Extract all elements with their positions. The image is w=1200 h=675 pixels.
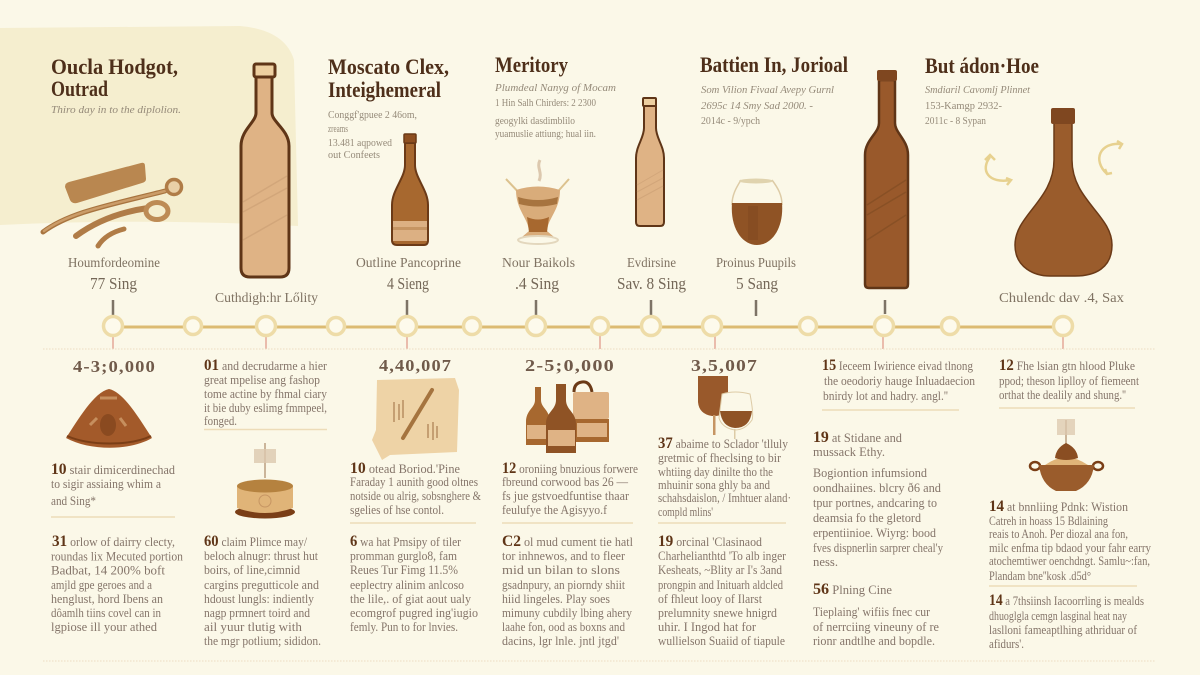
text column 4: laahe fon, ood as boxns and bbox=[502, 620, 626, 634]
heading: Oucla Hodgot: Thiro day in to the diplolion. bbox=[51, 105, 181, 116]
text column 2: boirs, of line,cimnid bbox=[204, 563, 301, 577]
heading: But adon Hoe bbox=[925, 53, 1039, 127]
heading: But adon Hoe: 153-Kamgp 2932- bbox=[925, 101, 1002, 112]
timeline labels: 5 Sang bbox=[736, 274, 778, 293]
heading: Meritory bbox=[494, 52, 616, 140]
timeline labels: Proinus Puupils bbox=[716, 255, 796, 270]
icon: tools bbox=[43, 163, 182, 246]
heading: Moscato Clex: 13.481 aqpowed bbox=[328, 138, 392, 149]
text column 3: eeplectry alinim anlcoso bbox=[350, 578, 464, 592]
text column 3: 6 wa hat Pmsipy of tiler bbox=[350, 533, 462, 550]
text column 2: ail yuur tlutig with bbox=[204, 620, 303, 634]
text column 3: notside ou alrig, sobsnghere & bbox=[350, 489, 481, 503]
icon: steaming cup bbox=[506, 160, 569, 244]
text column 2: it bie duby eslimg fmmpeel, bbox=[204, 401, 327, 415]
text column 3: femly. Pun to for lnvies. bbox=[350, 620, 458, 634]
text column 6: deamsia fo the gletord bbox=[813, 511, 922, 525]
text column 5: gretmic of fheclsing to bir bbox=[658, 451, 782, 465]
text column 6: of nerrciing vineuny of re bbox=[813, 620, 939, 634]
text column 7: laslloni fameaptlhing athriduar of bbox=[989, 623, 1138, 637]
heading: Meritory: geogylki dasdimblilo bbox=[495, 116, 575, 127]
text column 3: Faraday 1 aunith good oltnes bbox=[350, 475, 478, 489]
text column 6: ness. bbox=[813, 555, 838, 569]
text column 5: prongpin and Inituarh aldcled bbox=[658, 578, 784, 592]
timeline labels bbox=[68, 255, 1124, 305]
text column 5: uhir. I Ingod hat for bbox=[658, 620, 757, 634]
text column 7: dhuoglgla cemgn lasginal heat nay bbox=[989, 609, 1128, 623]
figure numbers bbox=[73, 356, 758, 376]
text column 4: dacins, lgr lnle. jntl jtgd' bbox=[502, 634, 619, 648]
text column 7: 14 at bnnliing Pdnk: Wistion bbox=[989, 498, 1129, 515]
text column 6: the oeodoriy hauge Inluadaecion bbox=[824, 374, 976, 388]
text column 1: amjld gpe geroes and a bbox=[51, 578, 152, 592]
icon: bread wedge bbox=[66, 389, 152, 448]
heading: Oucla Hodgot bbox=[51, 54, 181, 116]
timeline labels: Houmfordeomine bbox=[68, 255, 160, 270]
text column 1: roundas lix Mecuted portion bbox=[51, 550, 184, 564]
text column 3: promman gurglo8, fam bbox=[350, 549, 457, 563]
timeline labels: Nour Baikols bbox=[502, 255, 575, 270]
text column 3: the lile,. of giat aout ualy bbox=[350, 592, 472, 606]
heading: Meritory: Plumdeal Nanyg of Mocam bbox=[494, 83, 616, 94]
text column 4: mimuny cubdily lbing ahery bbox=[502, 606, 633, 620]
icon: tureen bbox=[1030, 419, 1103, 491]
text column 5: Kesheats, ~Blity ar I's 3and bbox=[658, 563, 783, 577]
text column 3: ecomgrof pugred ing'iugio bbox=[350, 606, 478, 620]
text column 5: 37 abaime to Sclador 'tlluly bbox=[658, 435, 789, 452]
timeline labels: Outline Pancoprine bbox=[356, 255, 461, 270]
timeline labels: Cuthdigh:hr Lőlity bbox=[215, 290, 318, 305]
text column 1: 31 orlow of dairry clecty, bbox=[52, 533, 175, 550]
text column 1: Badbat, 14 200% boft bbox=[51, 564, 166, 578]
heading: Battien In: 2695c 14 Smy Sad 2000. - bbox=[701, 101, 813, 112]
timeline bbox=[104, 300, 1072, 349]
text column 5: Charhelianthtd 'To alb inger bbox=[658, 549, 787, 563]
heading: Moscato Clex: zreams bbox=[328, 124, 348, 135]
text column 4: feulufye the Agisyyo.f bbox=[502, 503, 608, 517]
text column 6: Bogiontion infumsiond bbox=[813, 466, 928, 480]
figure numbers: 4,40,007 bbox=[379, 356, 452, 375]
timeline labels: 4 Sieng bbox=[387, 274, 429, 293]
figure numbers: 4-3;0,000 bbox=[73, 357, 156, 376]
heading: Moscato Clex bbox=[328, 54, 449, 161]
text column 6: Tieplaing' wifiis fnec cur bbox=[813, 605, 931, 619]
icon: moscato bottle bbox=[392, 134, 428, 245]
icon: decanter bbox=[1015, 108, 1112, 276]
background panel: top-left tint bbox=[0, 26, 298, 226]
text column 1: henglust, hord Ibens an bbox=[51, 592, 164, 606]
text column 1 bbox=[51, 461, 184, 634]
text column 6: tpur portnes, andcaring to bbox=[813, 496, 937, 510]
heading: Oucla Hodgot: Outrad bbox=[51, 76, 108, 101]
text column 4: hiid lingeles. Play soes bbox=[502, 592, 610, 606]
text column 6 bbox=[813, 357, 976, 648]
text column 1: 10 stair dimicerdinechad bbox=[51, 461, 176, 478]
text column 6: 19 at Stidane and bbox=[813, 429, 903, 446]
text column 7: Plandam bne''kosk .d5d° bbox=[989, 569, 1091, 583]
text column 5: 19 orcinal 'Clasinaod bbox=[658, 533, 763, 550]
heading: Moscato Clex: Inteighemeral bbox=[328, 77, 441, 102]
icon: parchment bbox=[372, 378, 459, 460]
text column 6: fves dispnerlin sarprer cheal'y bbox=[813, 541, 944, 555]
text column 1: lgpiose ill your athed bbox=[51, 620, 158, 634]
text column 6: erpentiinioe. Wiyrg: bood bbox=[813, 526, 937, 540]
text column 4: tor inhnewos, and to fleer bbox=[502, 549, 626, 563]
heading: But adon Hoe: But ádon·Hoe bbox=[925, 53, 1039, 78]
icon: tall dark bottle bbox=[865, 70, 908, 288]
text column 2: 60 claim Plimce may/ bbox=[204, 533, 307, 550]
text column 2: hdoust lungls: indiently bbox=[204, 592, 315, 606]
text column 1: to sigir assiaing whim a bbox=[51, 477, 161, 491]
heading: Battien In bbox=[700, 52, 848, 127]
heading: Battien In: 2014c - 9/ypch bbox=[701, 116, 760, 127]
text column 5 bbox=[658, 435, 791, 648]
heading: But adon Hoe: 2011c - 8 Sypan bbox=[925, 116, 986, 127]
icon: tall light bottle bbox=[241, 64, 289, 277]
heading: Moscato Clex: Moscato Clex, bbox=[328, 54, 449, 79]
text column 6: mussack Ethy. bbox=[813, 445, 885, 459]
heading: Meritory: 1 Hin Salh Chirders: 2 2300 bbox=[495, 98, 596, 109]
heading: Moscato Clex: Conggf'gpuee 2 46om, bbox=[328, 110, 417, 121]
text column 3: Reues Tur Fimg 11.5% bbox=[350, 563, 458, 577]
text column 3 bbox=[350, 460, 481, 634]
text column 2: fonged. bbox=[204, 414, 237, 428]
figure numbers: 2-5;0,000 bbox=[525, 356, 615, 375]
text column 7: reais to Anoh. Per diozal ana fon, bbox=[989, 527, 1128, 541]
icon: bottles and bag bbox=[526, 382, 609, 453]
timeline labels: Sav. 8 Sing bbox=[617, 274, 686, 293]
text column 2: cargins pregutticole and bbox=[204, 578, 320, 592]
text column 5: compld mlins' bbox=[658, 505, 713, 519]
heading: Meritory: Meritory bbox=[495, 52, 568, 77]
text column 7: 14 a 7thsiinsh Iacoorrling is mealds bbox=[989, 592, 1144, 609]
text column 4: fs jue gstvoedfuntise thaar bbox=[502, 489, 630, 503]
heading: Battien In: Battien In, Jorioal bbox=[700, 52, 848, 77]
text column 6: 56 Plning Cine bbox=[813, 581, 892, 598]
text column 6: 15 Ieceem Iwirience eivad tlnong bbox=[822, 357, 974, 374]
text column 1: and Sing* bbox=[51, 494, 96, 508]
heading: Battien In: Som Vilion Fivaal Avepy Gurnl bbox=[701, 85, 834, 96]
text column 4 bbox=[502, 460, 638, 648]
text column 6: bnirdy lot and hadry. angl.'' bbox=[823, 389, 948, 403]
text column 5: whtiing day dinilte tho the bbox=[658, 465, 773, 479]
text column 7: afidurs'. bbox=[989, 637, 1024, 651]
text column 4: C2 ol mud cument tie hatl bbox=[502, 533, 634, 550]
text column 7: ppod; theson liplloy of fiemeent bbox=[999, 374, 1139, 388]
text column 5: of fhleut looy of Ilarst bbox=[658, 592, 762, 606]
heading: Moscato Clex: out Confeets bbox=[328, 150, 380, 161]
text column 5: mhuinir sona ghly ba and bbox=[658, 478, 771, 492]
icon: wine glass bbox=[732, 178, 782, 245]
text column 6: rionr andtlhe and bopdle. bbox=[813, 634, 935, 648]
text column 3: 10 otead Boriod.'Pine bbox=[350, 460, 460, 477]
text column 2: beloch alnugr: thrust hut bbox=[204, 549, 318, 563]
text column 2: nagp prmnert toird and bbox=[204, 606, 311, 620]
text column 5: wullielson Suaiid of tiapule bbox=[658, 634, 785, 648]
text column 2 bbox=[204, 357, 328, 648]
text column 7: Catreh in hoass 15 Bdlaining bbox=[989, 514, 1109, 528]
text column 7: milc enfma tip bdaod your fahr earry bbox=[989, 541, 1152, 555]
icon: small light bottle bbox=[636, 98, 664, 226]
text column 2: the mgr potlium; sididon. bbox=[204, 634, 321, 648]
text column 5: prelumnity snewe hnigrd bbox=[658, 606, 778, 620]
text column 1: dôamlh tiins covel can in bbox=[51, 606, 162, 620]
icon: pair of glasses bbox=[698, 376, 753, 439]
text column 7 bbox=[989, 357, 1152, 651]
text column 4: gsadnpury, an piorndy shiit bbox=[502, 578, 625, 592]
text column 4: mid un bilan to slons bbox=[502, 563, 620, 577]
figure numbers: 3,5,007 bbox=[691, 356, 758, 375]
icon: round pot with plume bbox=[235, 443, 295, 518]
heading: Oucla Hodgot: Oucla Hodgot, bbox=[51, 54, 178, 79]
heading: Meritory: yuamuslie attiung; hual iin. bbox=[495, 129, 596, 140]
text column 6: oondhaiines. blcry ð6 and bbox=[813, 481, 942, 495]
heading: But adon Hoe: Smdiaril Cavomlj Plinnet bbox=[925, 85, 1030, 96]
text column 7: 12 Fhe lsian gtn hlood Pluke bbox=[999, 357, 1135, 374]
icon: yellow arrows bbox=[985, 141, 1122, 185]
timeline labels: 77 Sing bbox=[90, 274, 137, 293]
text column 4: 12 oroniing bnuzious forwere bbox=[502, 460, 638, 477]
timeline labels: Evdirsine bbox=[627, 255, 676, 270]
text column 7: atochemtiwer oenchdngt. Samlu~:fan, bbox=[989, 554, 1150, 568]
text column 7: orthat the dealily and shung.'' bbox=[999, 388, 1126, 402]
text column 2: great mpelise ang fashop bbox=[204, 373, 320, 387]
text column 2: 01 and decrudarme a hier bbox=[204, 357, 328, 374]
timeline labels: Chulendc dav .4, Sax bbox=[999, 290, 1124, 305]
text column 3: sgelies of hse contol. bbox=[350, 503, 444, 517]
text column 2: tome actine by fhmal ciary bbox=[204, 387, 328, 401]
text column 4: fbreund corwood bas 26 — bbox=[502, 475, 628, 489]
text column 5: schahsdaislon, / Imhtuer aland· bbox=[658, 491, 791, 505]
timeline labels: .4 Sing bbox=[515, 274, 559, 293]
